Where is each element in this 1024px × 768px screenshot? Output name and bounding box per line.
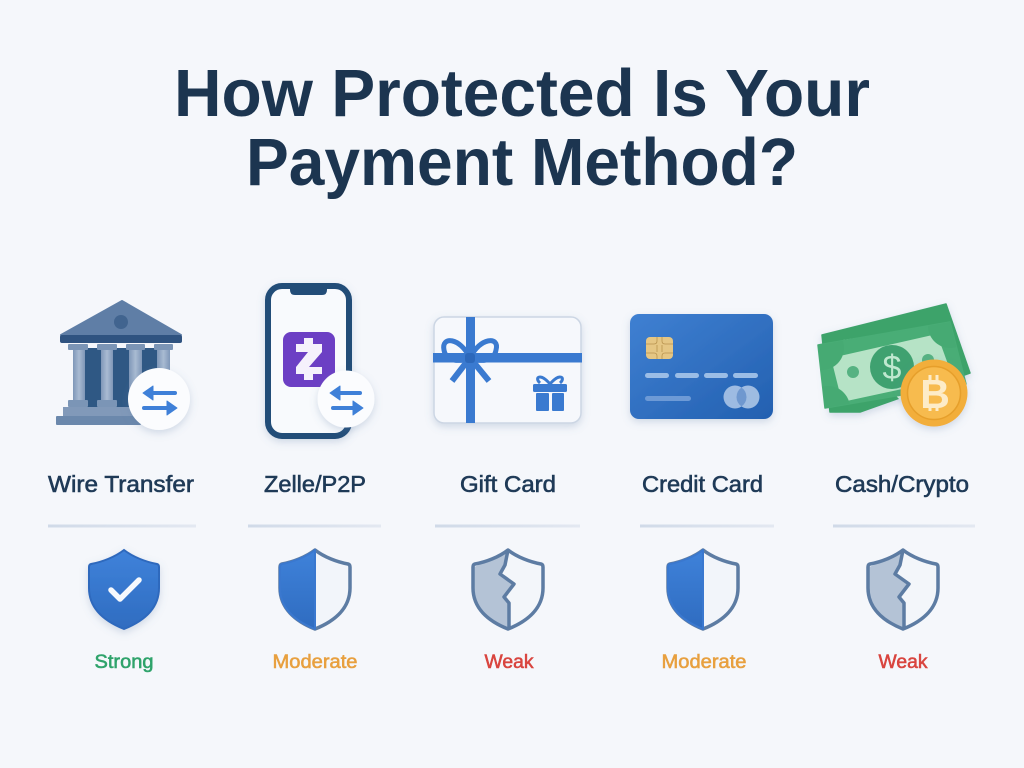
icon: gift card bbox=[433, 317, 582, 423]
title: Payment Method? bbox=[246, 125, 798, 200]
icon: credit card bbox=[630, 314, 773, 419]
label: Credit Card: Credit Card bbox=[642, 471, 763, 497]
icon: bank with transfer arrows bbox=[56, 301, 190, 430]
shield: moderate (Credit Card) bbox=[668, 550, 738, 629]
icon: cash and bitcoin: B bbox=[920, 371, 950, 417]
title bbox=[174, 56, 870, 200]
shield: moderate (Zelle/P2P) bbox=[280, 550, 350, 629]
icon: cash and bitcoin bbox=[800, 304, 972, 430]
rating: Strong: Strong bbox=[94, 652, 154, 673]
rating: Moderate (Credit Card): Moderate bbox=[662, 652, 746, 673]
label: Cash/Crypto: Cash/Crypto bbox=[835, 471, 969, 497]
label: Wire Transfer: Wire Transfer bbox=[48, 471, 194, 497]
rating: Weak (Gift Card): Weak bbox=[484, 652, 534, 673]
label: Zelle/P2P: Zelle/P2P bbox=[264, 471, 366, 497]
shield: weak (Gift Card) bbox=[473, 550, 543, 629]
icon: cash and bitcoin: $ bbox=[883, 349, 902, 387]
title: How Protected Is Your bbox=[174, 56, 870, 131]
icon: phone with Zelle app bbox=[268, 285, 374, 436]
label: Gift Card: Gift Card bbox=[460, 471, 556, 497]
rating: Weak (Cash/Crypto): Weak bbox=[878, 652, 928, 673]
shield: strong bbox=[89, 550, 159, 629]
rating: Moderate (Zelle/P2P): Moderate bbox=[272, 652, 358, 673]
shield: weak (Cash/Crypto) bbox=[868, 550, 938, 629]
